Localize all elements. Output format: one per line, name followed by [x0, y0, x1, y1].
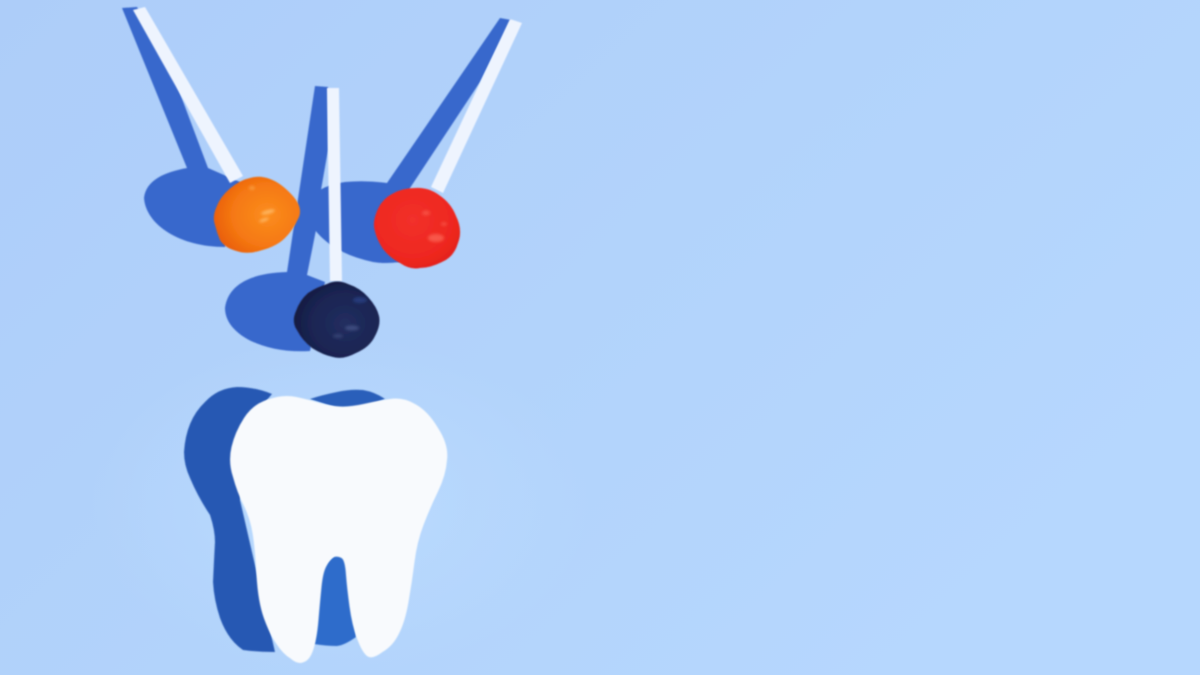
shadow: tooth root gap [314, 552, 356, 646]
stick: middle [327, 88, 342, 281]
stick: right [431, 19, 522, 193]
stick: left [133, 7, 243, 183]
shadow: middle lollipop [225, 86, 328, 351]
background glow behind tooth [90, 337, 590, 673]
tooth [230, 396, 447, 663]
lollipop: orange candy [214, 177, 300, 253]
shadow: tooth right lobe [310, 390, 385, 412]
shadow: left lollipop [122, 7, 240, 247]
candy highlight [422, 210, 447, 242]
lollipop shadows [122, 7, 511, 351]
candy highlight [249, 186, 275, 223]
candy highlight [333, 297, 367, 338]
lollipop sticks [133, 7, 522, 281]
lollipop: red candy [374, 188, 460, 268]
lollipop: navy candy [294, 282, 380, 358]
tooth shadow [184, 387, 385, 652]
shadow: right lollipop [315, 18, 511, 263]
shadow: tooth left lobe [184, 387, 275, 652]
